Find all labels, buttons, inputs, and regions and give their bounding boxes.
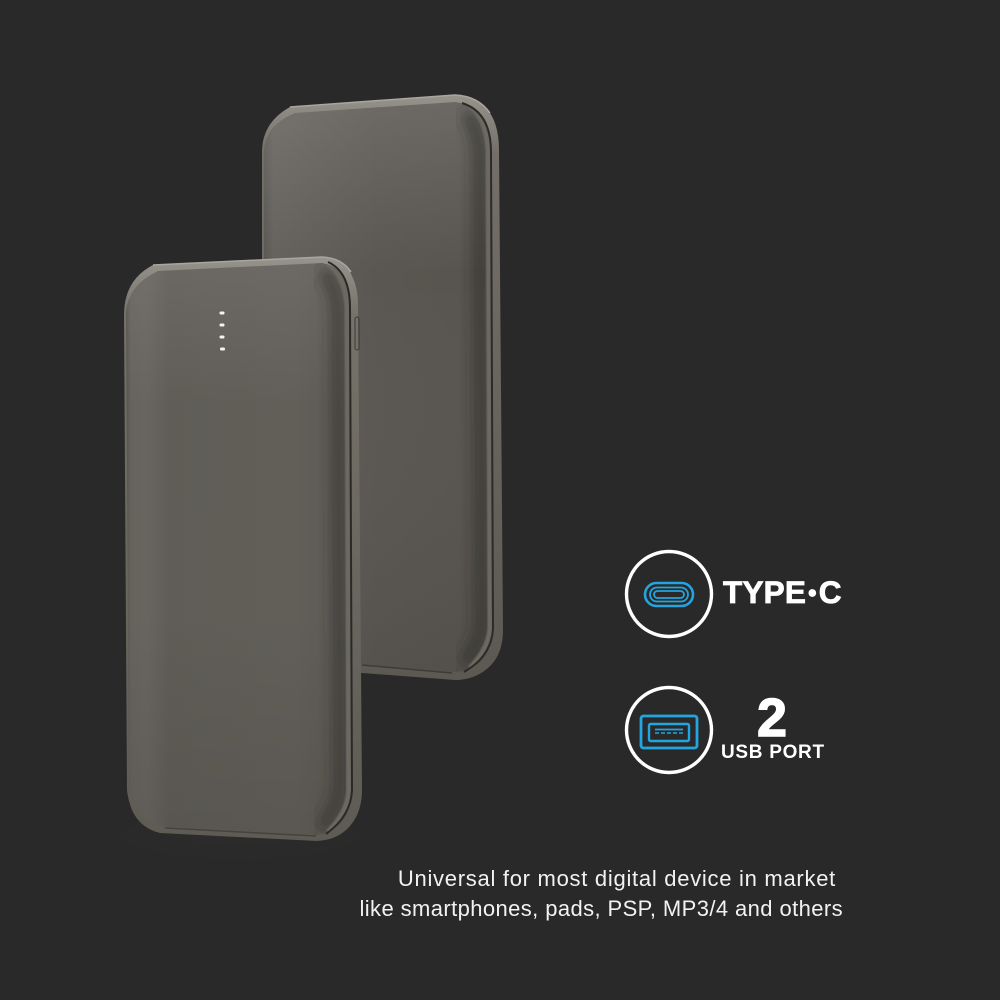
icon: Type-C port in circle: [626, 552, 712, 636]
label: Type-C: TYPE•C: [723, 574, 842, 610]
USB port text: USB PORT: [721, 742, 825, 763]
description text: [359, 866, 843, 921]
number 2: 2: [757, 688, 787, 748]
front power bank: [124, 257, 362, 841]
icon: USB port in circle: [626, 688, 712, 772]
side button: [355, 317, 359, 350]
product illustration: two power banks: [124, 94, 714, 841]
floor reflection: [115, 806, 365, 890]
description line 1: Universal for most digital device in market: [398, 866, 836, 891]
label: 2 USB port: [721, 688, 825, 763]
back power bank: [262, 95, 503, 680]
description line 2: like smartphones, pads, PSP, MP3/4 and others: [359, 896, 843, 921]
LED indicators: [220, 312, 225, 350]
